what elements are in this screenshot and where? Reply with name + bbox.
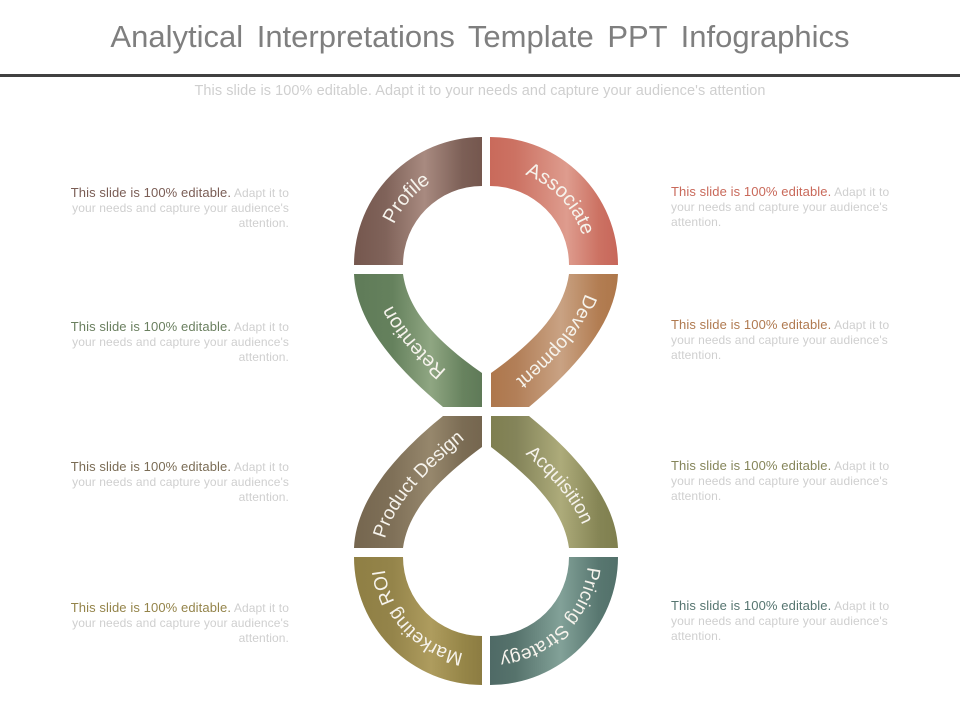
text block: Pricing Strategy: your needs and capture your audience's [671, 614, 888, 628]
text block: Marketing ROI: attention. [239, 631, 289, 645]
text block: Marketing ROI: your needs and capture your audience's [72, 616, 289, 630]
segment: Product Design: Product Design [372, 433, 464, 538]
text block: Associate [671, 184, 889, 229]
segment: Pricing Strategy [490, 557, 618, 685]
text block: Associate: attention. [671, 215, 721, 229]
text block: Acquisition [671, 458, 889, 503]
text block: Pricing Strategy [671, 598, 889, 643]
text block: Retention: your needs and capture your audience's [72, 335, 289, 349]
text block: Product Design [71, 459, 289, 504]
segment: Profile: Profile [382, 176, 429, 223]
text block: Retention [71, 319, 289, 364]
text block: Product Design: This slide is 100% editable. Adapt it to [71, 459, 289, 474]
text block: Development: attention. [671, 348, 721, 362]
text block: Profile: your needs and capture your audience's [72, 201, 289, 215]
text block: Development: This slide is 100% editable. Adapt it to [671, 317, 889, 332]
text block: Acquisition: your needs and capture your audience's [671, 474, 888, 488]
segment: Development: Development [516, 294, 597, 388]
figure-eight diagram [354, 137, 618, 685]
segment: Marketing ROI [354, 557, 482, 685]
title rule [0, 74, 960, 77]
segment: Development [491, 274, 618, 407]
text block: Profile: This slide is 100% editable. Adapt it to [71, 185, 289, 200]
title: Analytical Interpretations Template PPT Infographics [110, 19, 850, 54]
text block: Profile [71, 185, 289, 230]
segment: Associate: Associate [525, 164, 592, 234]
text block: Development [671, 317, 889, 362]
text block: Associate: your needs and capture your audience's [671, 200, 888, 214]
segment: Profile [354, 137, 482, 265]
segment: Retention: Retention [384, 306, 446, 380]
text block: Acquisition: attention. [671, 489, 721, 503]
segment: Product Design [354, 416, 482, 548]
text block: Pricing Strategy: attention. [671, 629, 721, 643]
text block: Acquisition: This slide is 100% editable. Adapt it to [671, 458, 889, 473]
text block: Product Design: attention. [239, 490, 289, 504]
text block: Profile: attention. [239, 216, 289, 230]
text block: Retention: This slide is 100% editable. Adapt it to [71, 319, 289, 334]
segment: Retention [354, 274, 482, 407]
segment: Acquisition: Acquisition [525, 448, 590, 524]
text block: Associate: This slide is 100% editable. Adapt it to [671, 184, 889, 199]
text block: Marketing ROI [71, 600, 289, 645]
text block: Development: your needs and capture your audience's [671, 333, 888, 347]
text block: Retention: attention. [239, 350, 289, 364]
text block: Product Design: your needs and capture your audience's [72, 475, 289, 489]
text block: Marketing ROI: This slide is 100% editable. Adapt it to [71, 600, 289, 615]
text block: Pricing Strategy: This slide is 100% editable. Adapt it to [671, 598, 889, 613]
segment: Marketing ROI: Marketing ROI [372, 571, 462, 666]
segment: Associate [490, 137, 618, 265]
subtitle: This slide is 100% editable. Adapt it to your needs and capture your audience's attention [194, 83, 766, 99]
segment: Acquisition [491, 416, 618, 548]
segment: Pricing Strategy: Pricing Strategy [501, 568, 600, 665]
